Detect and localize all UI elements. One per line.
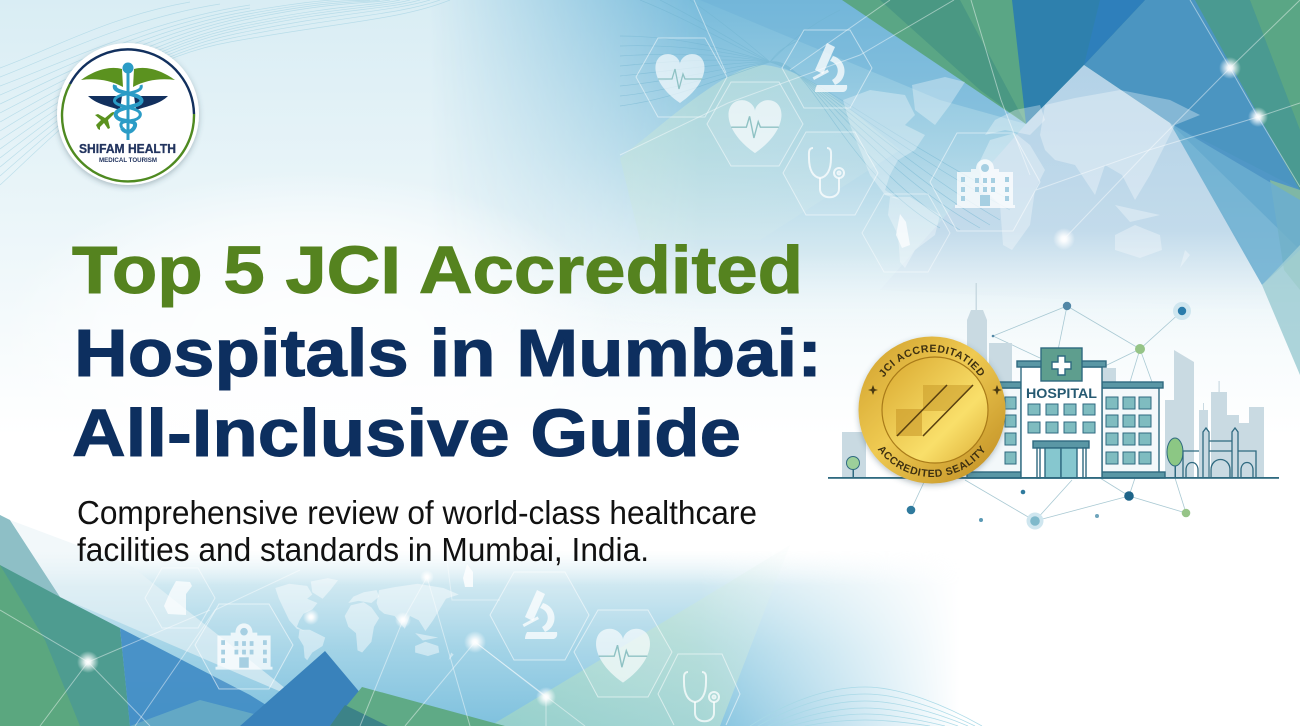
logo name: SHIFAM HEALTH <box>79 141 176 156</box>
hexagon: hospital bottom <box>195 604 293 689</box>
subtitle: Comprehensive review of world-class healthcare <box>77 494 757 531</box>
hexagon: microscope top <box>782 30 872 108</box>
hexagon: heart top <box>636 38 727 117</box>
title <box>72 233 822 471</box>
hexagon: person bottom <box>145 568 215 628</box>
ground line <box>828 477 1279 479</box>
seal text top: JCI ACCREDITATIED <box>879 344 984 377</box>
hexagon: heart bottom <box>574 610 672 697</box>
hexagon: hospital top <box>930 133 1040 231</box>
icon: logo wings <box>81 68 175 110</box>
hospital sign <box>1041 348 1082 381</box>
hexagon: microscope bottom <box>490 572 589 660</box>
entrance <box>1033 441 1089 478</box>
hospital label: HOSPITAL <box>1026 385 1097 401</box>
seal stars <box>868 385 1002 395</box>
hospital building <box>960 348 1165 478</box>
right wing <box>1102 382 1165 478</box>
seal text bottom: ACCREDITED SEALITY <box>878 445 984 477</box>
hexagon: heart centre <box>707 82 803 166</box>
icon: plane <box>95 112 114 130</box>
hexagon: stethoscope top <box>783 132 878 215</box>
hexagon: south america <box>862 194 950 272</box>
decorative wave lines: bottom right <box>750 687 982 726</box>
title line 1: Top 5 JCI Accredited <box>72 233 803 308</box>
skyline <box>842 283 1264 478</box>
gateway of india <box>1183 428 1256 478</box>
logo <box>57 43 199 185</box>
trees <box>846 438 1183 478</box>
subtitle <box>77 494 757 568</box>
left wing <box>960 382 1021 478</box>
network graph <box>907 302 1191 530</box>
logo tagline: MEDICAL TOURISM <box>99 158 157 164</box>
hexagon: stethoscope bottom <box>658 654 740 725</box>
seal emblem <box>896 385 973 436</box>
subtitle: facilities and standards in Mumbai, India. <box>77 531 649 568</box>
gold seal <box>855 335 1009 489</box>
title line 2: Hospitals in Mumbai: <box>74 316 822 391</box>
decorative wave lines: top left <box>0 0 450 185</box>
central block <box>1017 361 1106 478</box>
world map bottom <box>275 578 459 660</box>
title line 3: All-Inclusive Guide <box>72 396 741 471</box>
hexagon: small figure bottom <box>446 552 500 600</box>
icon: caduceus <box>114 62 142 140</box>
decorative wave lines: top centre <box>620 0 1010 230</box>
world map top <box>843 77 1200 268</box>
